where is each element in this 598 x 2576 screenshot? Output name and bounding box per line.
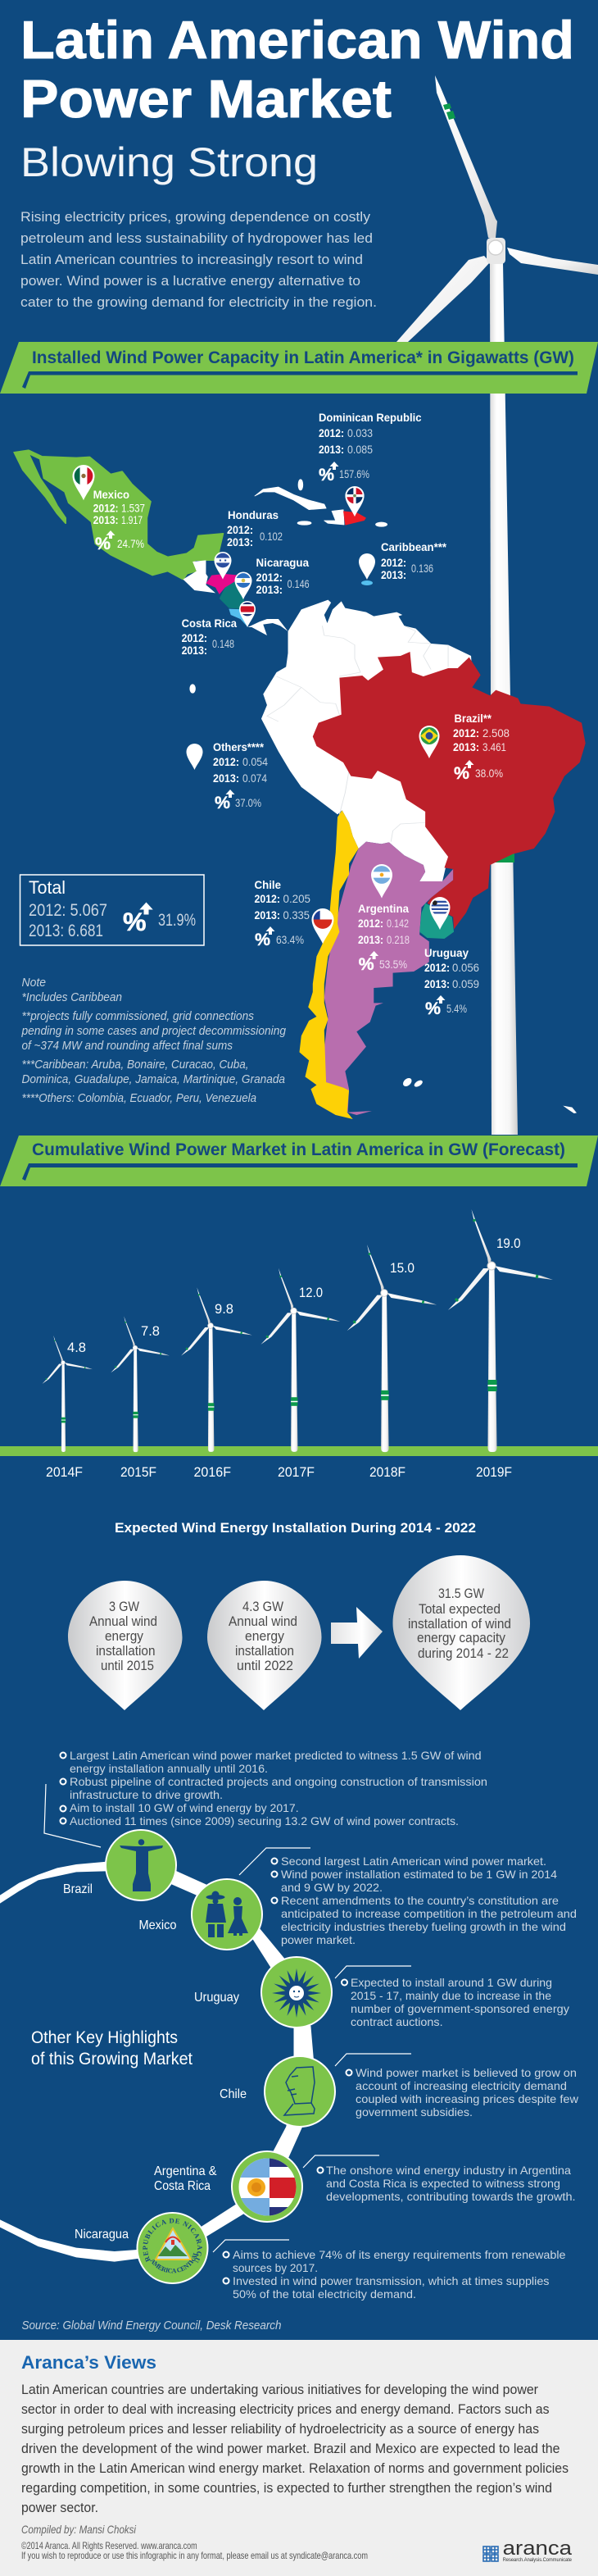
label: Chile: Chile xyxy=(254,878,281,891)
label: Nicaragua: 0.146 xyxy=(288,577,310,590)
intro paragraph: power. Wind power is a lucrative energy alternative to xyxy=(20,273,360,289)
bullets: Brazil: Auctioned 11 times (since 2009) securing 13.2 GW of wind power contracts. xyxy=(70,1814,459,1827)
node: Uruguay xyxy=(261,1957,332,2028)
node: Brazil xyxy=(106,1830,176,1900)
label: Honduras xyxy=(227,508,283,548)
map: Costa Rica xyxy=(229,609,248,627)
pin: Uruguay xyxy=(429,897,451,930)
forecast values: 4.8 xyxy=(67,1340,86,1355)
arc country labels: Argentina & xyxy=(154,2164,217,2178)
map: Honduras xyxy=(206,574,238,594)
callout: 3 GW: 3 GW xyxy=(109,1599,139,1614)
map notes: *Includes Caribbean xyxy=(21,991,122,1004)
bullets: Brazil: Largest Latin American wind power market predicted to witness 1.5 GW of wind xyxy=(70,1749,482,1762)
map: Brazil xyxy=(313,652,586,929)
label: Mexico: 2013: xyxy=(93,513,119,526)
label: Caribbean: 2013: xyxy=(381,568,406,581)
arc country labels: Chile xyxy=(220,2087,247,2101)
views paragraph: driven the development of the wind power market. Brazil and Mexico are expected to lead the xyxy=(21,2441,560,2456)
bullets: Argentina and Costa Rica: and Costa Rica is expected to witness strong xyxy=(326,2177,560,2190)
map: Chile xyxy=(299,810,359,1119)
label: Dominican Republic: % xyxy=(319,466,334,485)
forecast year axis: 2018F xyxy=(369,1464,405,1480)
label: Uruguay: 0.056 xyxy=(452,961,479,974)
bullets: Uruguay: number of government-sponsored energy xyxy=(351,2002,569,2015)
label: Others: 2012: xyxy=(213,755,239,768)
callout: 4.3 GW: installation xyxy=(235,1643,294,1659)
leader lines xyxy=(44,1784,411,2252)
callout: 4.3 GW: 4.3 GW xyxy=(242,1599,283,1614)
callout: 4.3 GW: energy xyxy=(245,1628,284,1644)
label: Mexico: % xyxy=(95,535,111,553)
label: Argentina xyxy=(358,902,410,974)
pin: Others xyxy=(187,744,203,770)
bullets: Mexico: anticipated to increase competition in the petroleum and xyxy=(281,1907,577,1920)
arc country labels: Mexico xyxy=(139,1918,177,1932)
map: Argentina xyxy=(316,842,453,1115)
bullets: Brazil: infrastructure to drive growth. xyxy=(70,1788,223,1801)
forecast year axis: 2017F xyxy=(278,1464,315,1480)
callout: 31.5 GW xyxy=(393,1555,530,1710)
label: Honduras: 2013: xyxy=(227,535,253,548)
forecast year axis: 2016F xyxy=(193,1464,231,1480)
callout: 31.5 GW: during 2014 - 22 xyxy=(418,1645,509,1661)
label: Others: Others**** xyxy=(213,740,265,753)
map notes: **projects fully commissioned, grid connections xyxy=(21,1010,254,1023)
forecast values xyxy=(67,1236,521,1355)
views paragraph: Latin American countries are undertaking various initiatives for developing the wind power xyxy=(21,2382,538,2397)
pin: Argentina xyxy=(371,864,392,899)
icon: Nicaragua coat of arms: REPUBLICA DE NICARAGUA xyxy=(143,2219,202,2263)
turbine 2018F xyxy=(347,1245,437,1452)
label: Mexico xyxy=(93,488,145,553)
bullets: Nicaragua: 50% of the total electricity demand. xyxy=(233,2287,416,2301)
label: Costa Rica: 2012: xyxy=(182,631,207,644)
label: Others: 37.0% xyxy=(235,796,261,809)
bullets: Uruguay xyxy=(342,1976,569,2028)
map notes: Dominica, Guadalupe, Jamaica, Martinique, Granada xyxy=(21,1073,285,1086)
map notes: ***Caribbean: Aruba, Bonaire, Curacao, Cuba, xyxy=(21,1058,249,1072)
label: Dominican Republic: 0.033 xyxy=(347,426,373,439)
label: Nicaragua: 2012: xyxy=(256,571,283,584)
title block: Blowing Strong xyxy=(20,139,318,185)
map: Dominican Republic xyxy=(343,511,366,526)
map: Caribbean islands xyxy=(190,480,387,693)
label: Costa Rica xyxy=(182,617,237,657)
label: Mexico: Mexico xyxy=(93,488,129,501)
copyright: ©2014 Aranca. All Rights Reserved. www.aranca.com xyxy=(21,2540,197,2551)
map: Nicaragua xyxy=(220,580,244,609)
bullets: Argentina and Costa Rica: The onshore wind energy industry in Argentina xyxy=(326,2164,571,2177)
banner: cumulative forecast: Cumulative Wind Power Market in Latin America in GW (Forecast) xyxy=(32,1140,565,1159)
forecast values: 19.0 xyxy=(496,1236,521,1251)
title block xyxy=(20,10,574,185)
pin: Mexico xyxy=(72,465,95,500)
label: Chile: % xyxy=(255,931,270,949)
bullets: Chile: government subsidies. xyxy=(356,2105,473,2119)
forecast values: 12.0 xyxy=(299,1285,323,1300)
views paragraph: growth in the Latin American wind energy market. Relaxation of norms and government policies xyxy=(21,2460,569,2476)
label: Argentina: 2013: xyxy=(358,933,383,946)
callout: 4.3 GW: until 2022 xyxy=(237,1658,293,1673)
callout: 3 GW: installation xyxy=(96,1643,156,1659)
label: Costa Rica: Costa Rica xyxy=(182,617,237,630)
forecast values: 7.8 xyxy=(141,1323,160,1339)
bullets: Mexico: electricity industries thereby fueling growth in the wind xyxy=(281,1920,566,1933)
label: Uruguay: Uruguay xyxy=(424,946,469,959)
highlights arc xyxy=(0,1862,314,2262)
bullets: Chile: account of increasing electricity demand xyxy=(356,2079,567,2092)
bullets: Mexico: and 9 GW by 2022. xyxy=(281,1881,383,1894)
label: Uruguay: % xyxy=(425,999,441,1018)
bullets: Argentina and Costa Rica: developments, contributing towards the growth. xyxy=(326,2190,576,2203)
label: Costa Rica: 0.148 xyxy=(212,637,234,650)
label: Caribbean: 2012: xyxy=(381,556,406,569)
label: Brazil: % xyxy=(454,764,469,783)
label: Dominican Republic: 0.085 xyxy=(347,443,373,456)
bullets: Chile: Wind power market is believed to grow on xyxy=(356,2066,577,2079)
forecast year axis: 2019F xyxy=(476,1464,512,1480)
label: Argentina: % xyxy=(359,955,374,974)
label: Others xyxy=(213,740,268,812)
label: Nicaragua: Nicaragua xyxy=(256,556,309,569)
label: Caribbean: Caribbean*** xyxy=(381,540,447,553)
label: Mexico: 1.537 xyxy=(121,501,145,514)
label: Costa Rica: 2013: xyxy=(182,644,207,657)
label: Dominican Republic xyxy=(319,411,422,485)
label: Others: 0.074 xyxy=(242,771,267,785)
node: Mexico xyxy=(192,1879,262,1950)
icon: Mexican couple xyxy=(206,1891,248,1937)
total box: 2012: 5.067 xyxy=(29,901,107,920)
label: Brazil: 2012: xyxy=(453,726,479,740)
forecast values: 9.8 xyxy=(215,1301,233,1317)
label: Argentina: 53.5% xyxy=(379,958,407,971)
bullets: Argentina and Costa Rica xyxy=(318,2164,576,2203)
total box: 31.9% xyxy=(158,911,196,930)
callout: 3 GW: Annual wind xyxy=(89,1613,157,1629)
label: Others: 0.054 xyxy=(242,755,268,768)
source note: Source: Global Wind Energy Council, Desk Research xyxy=(21,2319,282,2333)
callout: 31.5 GW: 31.5 GW xyxy=(438,1586,484,1601)
chart: forecast turbines xyxy=(0,1209,598,1480)
label: Argentina: 0.142 xyxy=(387,917,409,930)
turbine 2019F xyxy=(448,1209,553,1452)
bullets: Brazil: Robust pipeline of contracted projects and ongoing construction of transmission xyxy=(70,1775,487,1788)
bullets: Nicaragua: Invested in wind power transmission, which at times supplies xyxy=(233,2274,549,2287)
label: Brazil: 2013: xyxy=(453,740,479,753)
label: Chile: 2012: xyxy=(254,892,280,905)
icon: sun of May xyxy=(272,1968,321,2018)
forecast year axis: 2015F xyxy=(120,1464,156,1480)
turbine 2016F xyxy=(181,1287,252,1452)
total box: % xyxy=(123,907,146,936)
title block: Power Market xyxy=(20,69,392,129)
logo: aranca xyxy=(483,2537,573,2563)
label: Brazil: Brazil** xyxy=(454,712,492,725)
label: Honduras: 0.102 xyxy=(260,530,283,543)
label: Caribbean: 0.136 xyxy=(411,562,433,575)
intro paragraph: petroleum and less sustainability of hydropower has led xyxy=(20,230,373,246)
bullets: Mexico: Wind power installation estimated to be 1 GW in 2014 xyxy=(281,1868,557,1881)
label: Uruguay: 0.059 xyxy=(452,977,479,990)
intro paragraph: cater to the growing demand for electricity in the region. xyxy=(20,294,377,310)
label: Nicaragua: 2013: xyxy=(256,583,283,596)
heading: other key highlights: of this Growing Market xyxy=(31,2050,193,2069)
bullets: Nicaragua: sources by 2017. xyxy=(233,2261,318,2274)
map: Latin America xyxy=(14,450,586,1119)
label: Dominican Republic: 2012: xyxy=(319,426,344,439)
heading: other key highlights: Other Key Highlights xyxy=(31,2028,178,2047)
pin: Honduras xyxy=(215,552,231,580)
bullets: Mexico: power market. xyxy=(281,1933,356,1946)
pin: Dominican Republic xyxy=(345,486,365,517)
label: Uruguay xyxy=(424,946,479,1018)
callout: 4.3 GW xyxy=(207,1581,321,1710)
large wind turbine xyxy=(396,75,598,1135)
label: Caribbean xyxy=(381,540,447,581)
map: northern South America xyxy=(261,600,473,881)
bullets: Nicaragua xyxy=(223,2248,566,2301)
node: Argentina and Costa Rica xyxy=(232,2151,302,2222)
bullets: Nicaragua: Aims to achieve 74% of its energy requirements from renewable xyxy=(233,2248,566,2261)
views paragraph xyxy=(21,2382,569,2515)
node: Chile xyxy=(265,2056,335,2127)
title block: Latin American Wind xyxy=(20,10,574,70)
arc country labels: Nicaragua xyxy=(75,2228,129,2241)
label: Uruguay: 5.4% xyxy=(446,1002,467,1015)
map notes: ****Others: Colombia, Ecuador, Peru, Venezuela xyxy=(21,1092,256,1105)
intro paragraph: Latin American countries to increasingly resort to wind xyxy=(20,252,363,267)
icon: moai head xyxy=(284,2067,315,2115)
map notes: Note xyxy=(21,976,46,990)
callout: 3 GW xyxy=(68,1581,182,1710)
arc country labels: Costa Rica xyxy=(154,2179,211,2193)
icon: Nicaragua coat of arms: AMERICA CENTRAL xyxy=(150,2251,198,2273)
pin: Chile xyxy=(311,908,334,944)
icon: split flag xyxy=(238,2156,297,2217)
label: Argentina: 0.218 xyxy=(387,933,410,946)
callout: 31.5 GW: Total expected xyxy=(419,1601,501,1617)
heading: expected installation: Expected Wind Energy Installation During 2014 - 2022 xyxy=(115,1520,476,1536)
bullets: Uruguay: contract auctions. xyxy=(351,2015,443,2028)
banner: installed capacity xyxy=(0,342,598,394)
pin: Nicaragua xyxy=(234,572,252,599)
label: Dominican Republic: 2013: xyxy=(319,443,344,456)
callout: 3 GW: energy xyxy=(105,1628,143,1644)
map: Guatemala and Belize xyxy=(183,560,215,593)
label: Others: % xyxy=(215,794,230,812)
pin: Caribbean xyxy=(359,553,375,585)
intro paragraph: Rising electricity prices, growing dependence on costly xyxy=(20,209,371,225)
node: Nicaragua xyxy=(136,2212,208,2284)
arc country labels: Uruguay xyxy=(194,1991,239,2005)
icon: Christ the Redeemer xyxy=(120,1839,163,1891)
map: Uruguay xyxy=(419,903,454,939)
map: southern islands xyxy=(401,1077,577,1113)
label: Honduras: Honduras xyxy=(228,508,279,521)
logo: aranca: aranca xyxy=(503,2537,573,2560)
panel: Aranca's Views xyxy=(0,2340,598,2576)
total box xyxy=(20,875,204,945)
bullets: Chile xyxy=(346,2066,579,2119)
views paragraph: sector in order to deal with increasing electricity prices and energy demand. Factors such as xyxy=(21,2401,549,2417)
label: Argentina: Argentina xyxy=(358,902,409,915)
banner: installed capacity: Installed Wind Power Capacity in Latin America* in Gigawatts (GW) xyxy=(32,348,574,367)
forecast year axis: 2014F xyxy=(46,1464,83,1480)
map: Mexico xyxy=(14,450,223,580)
logo: aranca: Research.Analysis.Communicate xyxy=(503,2557,572,2563)
label: Chile: 0.205 xyxy=(283,892,310,905)
bullets: Brazil: Aim to install 10 GW of wind energy by 2017. xyxy=(70,1801,299,1814)
label: Nicaragua xyxy=(256,556,310,596)
label: Brazil: 3.461 xyxy=(482,740,506,753)
label: Brazil: 2.508 xyxy=(482,726,510,740)
turbine 2017F xyxy=(260,1268,340,1452)
banner: cumulative forecast xyxy=(0,1136,598,1186)
pin: Costa Rica xyxy=(239,601,256,627)
label: Uruguay: 2013: xyxy=(424,977,450,990)
callout: 3 GW: until 2015 xyxy=(101,1658,154,1673)
views paragraph: surging petroleum prices and lesser reliability of hydroelectricity as a source of energy has xyxy=(21,2421,539,2437)
bullets: Brazil xyxy=(61,1749,487,1827)
total box: 2013: 6.681 xyxy=(29,922,103,940)
label: Dominican Republic: Dominican Republic xyxy=(319,411,422,424)
bullets: Uruguay: 2015 - 17, mainly due to increase in the xyxy=(351,1989,551,2002)
callout: 31.5 GW: installation of wind xyxy=(408,1616,511,1632)
intro paragraph xyxy=(20,209,377,310)
map notes: pending in some cases and project decommissioning xyxy=(21,1025,286,1038)
bullets: Mexico: Second largest Latin American wind power market. xyxy=(281,1855,546,1868)
copyright: If you wish to reproduce or use this infographic in any format, please email us at syndicate@aranca.com xyxy=(21,2550,368,2561)
arrow to total xyxy=(331,1607,383,1659)
forecast year axis xyxy=(46,1464,512,1480)
heading: other key highlights xyxy=(31,2028,193,2069)
map notes: of ~374 MW and rounding affect final sums xyxy=(21,1040,233,1053)
bullets: Mexico: Recent amendments to the country’s constitution are xyxy=(281,1894,559,1907)
bullets: Uruguay: Expected to install around 1 GW during xyxy=(351,1976,552,1989)
ground strip xyxy=(0,1446,598,1456)
compiled by: Compiled by: Mansi Choksi xyxy=(21,2523,137,2536)
map notes xyxy=(21,976,286,1105)
forecast values: 15.0 xyxy=(390,1260,415,1276)
label: Mexico: 2012: xyxy=(93,501,119,514)
arc country labels: Brazil xyxy=(63,1882,93,1896)
label: Chile: 0.335 xyxy=(283,908,310,922)
label: Chile: 2013: xyxy=(254,908,280,922)
icon: Nicaragua coat of arms xyxy=(143,2219,202,2273)
turbine 2014F xyxy=(43,1336,93,1452)
label: Argentina: 2012: xyxy=(358,917,383,930)
label: Uruguay: 2012: xyxy=(424,961,450,974)
bullets: Chile: coupled with increasing prices despite few xyxy=(356,2092,579,2105)
label: Dominican Republic: 157.6% xyxy=(339,467,369,480)
turbine 2015F xyxy=(111,1316,170,1452)
bullets: Brazil: energy installation annually until 2016. xyxy=(70,1762,268,1775)
copyright xyxy=(21,2540,368,2561)
total box: Total xyxy=(29,877,66,898)
callout: 4.3 GW: Annual wind xyxy=(229,1613,297,1629)
callout: 31.5 GW: energy capacity xyxy=(417,1630,505,1645)
arc country labels xyxy=(63,1882,247,2241)
bullets: Mexico xyxy=(272,1855,577,1946)
pin: Brazil xyxy=(419,726,439,758)
label: Chile: 63.4% xyxy=(276,933,304,946)
label: Chile xyxy=(254,878,310,949)
map: Panama xyxy=(248,619,288,635)
views paragraph: regarding competition, in some countries, is expected to further strengthen the region’s wind xyxy=(21,2480,552,2496)
label: Mexico: 1.917 xyxy=(121,513,143,526)
label: Brazil xyxy=(453,712,510,783)
label: Brazil: 38.0% xyxy=(475,767,503,780)
label: Honduras: 2012: xyxy=(227,523,253,536)
label: Mexico: 24.7% xyxy=(117,537,144,550)
views paragraph: power sector. xyxy=(21,2500,98,2515)
label: Others: 2013: xyxy=(213,771,239,785)
views heading: Aranca’s Views xyxy=(21,2352,156,2373)
